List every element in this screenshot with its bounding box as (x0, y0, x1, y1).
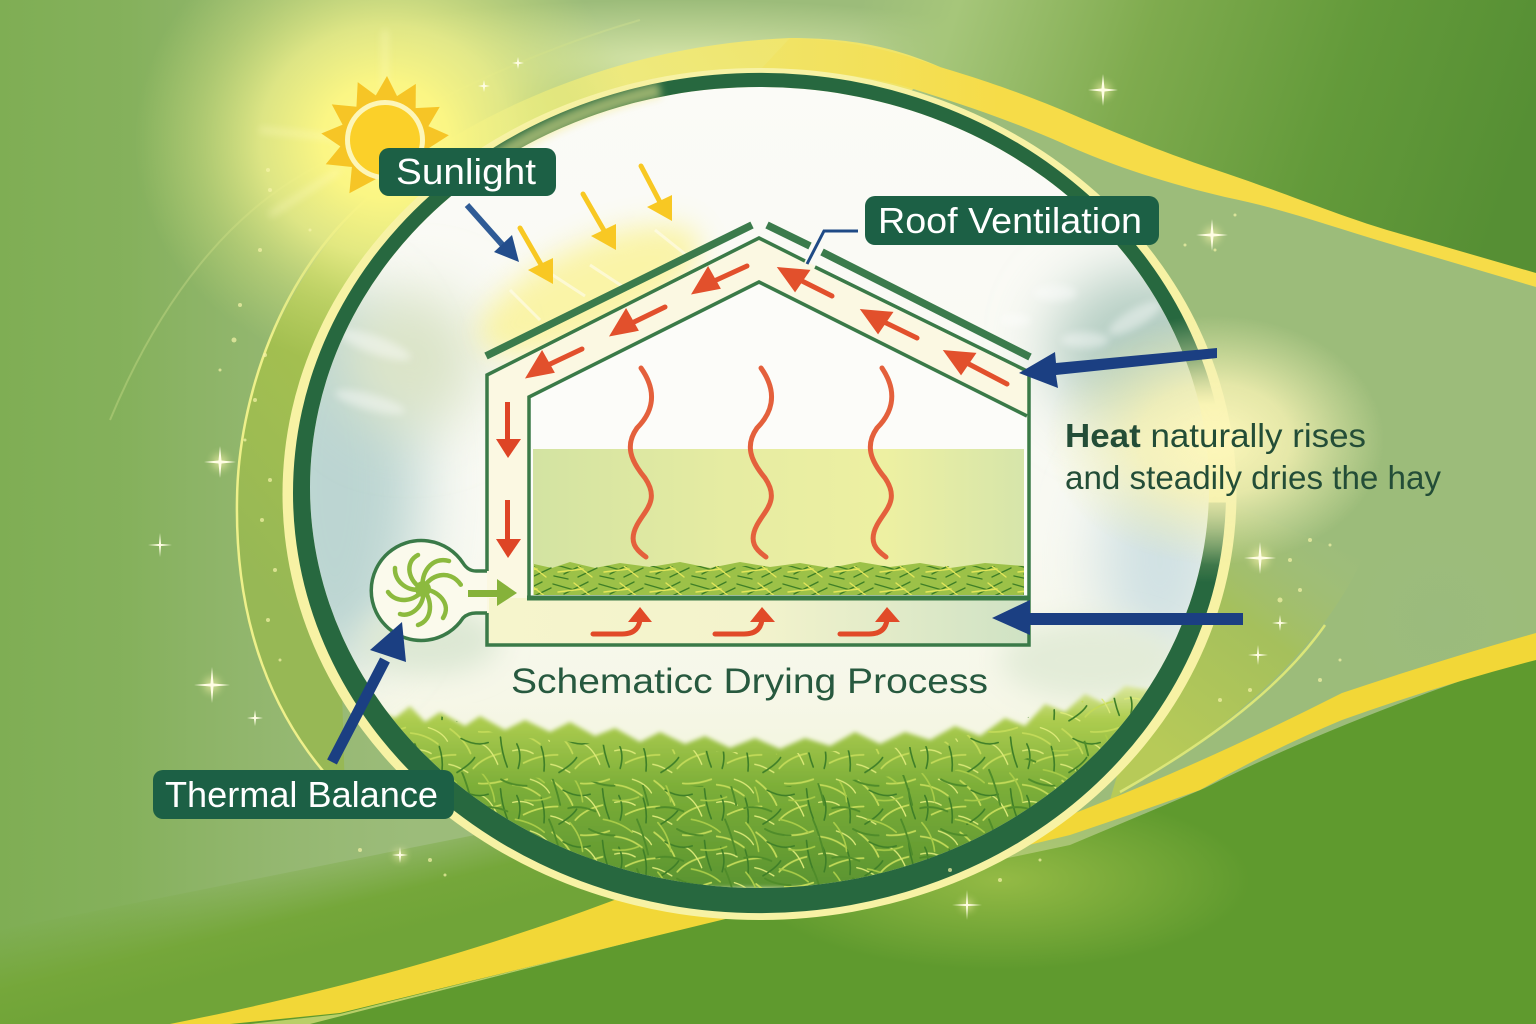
house schematic (486, 225, 1030, 645)
disc: outer yellow rim (282, 68, 1236, 920)
yellow ribbon: lower (170, 633, 1536, 1024)
sun glow (135, 0, 635, 370)
house: lower duct tint (487, 598, 1029, 645)
foreground grass (380, 686, 1210, 888)
label: Roof Ventilation: Roof Ventilation (878, 200, 1142, 241)
caption: process title: Schematicc Drying Process (511, 662, 988, 701)
disc: dark green ring (293, 73, 1226, 913)
fan blades (388, 555, 461, 625)
house: hay layer (534, 562, 1024, 595)
sun rays on roof (510, 230, 690, 320)
lower background swoosh: bottom left (0, 830, 720, 1024)
yellow sunlight arrows (520, 166, 672, 284)
fan unit (371, 540, 517, 640)
caption: heat explanation: Heat naturally rises (1065, 417, 1366, 454)
leader: roof ventilation (807, 231, 858, 264)
house: walls and inner lines (487, 238, 1029, 645)
label: Sunlight: Sunlight (396, 151, 536, 192)
blue arrow: thermal balance (332, 622, 406, 762)
yellow ribbon: upper (760, 38, 1536, 287)
crescent edge line (237, 195, 372, 795)
roof airflow arrows (530, 266, 1007, 384)
clouds (333, 285, 1165, 419)
rising heat waves (630, 368, 892, 557)
crescent lower right (1110, 490, 1362, 800)
crescent band around disc (237, 38, 940, 795)
faint outer arc (110, 20, 640, 420)
pale sliver under lower ribbon (250, 921, 713, 1024)
fan outflow arrow (468, 579, 517, 606)
glow behind caption (1045, 315, 1385, 565)
house: air gap fill (487, 238, 1029, 598)
wall airflow arrows (496, 402, 521, 558)
sun (260, 30, 450, 215)
blue arrow: floor inlet (992, 600, 1243, 635)
house: hay band (533, 449, 1024, 595)
caption: heat explanation (1065, 417, 1441, 496)
floor airflow arrows (593, 607, 900, 634)
house: drying chamber (529, 282, 1027, 598)
ring highlight near sun (470, 90, 660, 175)
label: Thermal Balance: Thermal Balance (165, 774, 438, 815)
lower background swoosh: bottom right (230, 655, 1536, 1024)
blue arrow: sunlight pointer (467, 205, 519, 262)
crescent lower right edge line (1120, 625, 1325, 792)
disc: sky and field (310, 87, 1209, 888)
blue arrow: roof inlet (1019, 348, 1217, 388)
house: roof outer shell (486, 225, 1030, 357)
caption: heat explanation: and steadily dries the hay (1065, 459, 1441, 496)
background panel: top right green (860, 0, 1536, 280)
label: Sunlight (379, 148, 556, 196)
sparkles and dust (148, 57, 1342, 920)
glow under disc (750, 790, 1250, 970)
